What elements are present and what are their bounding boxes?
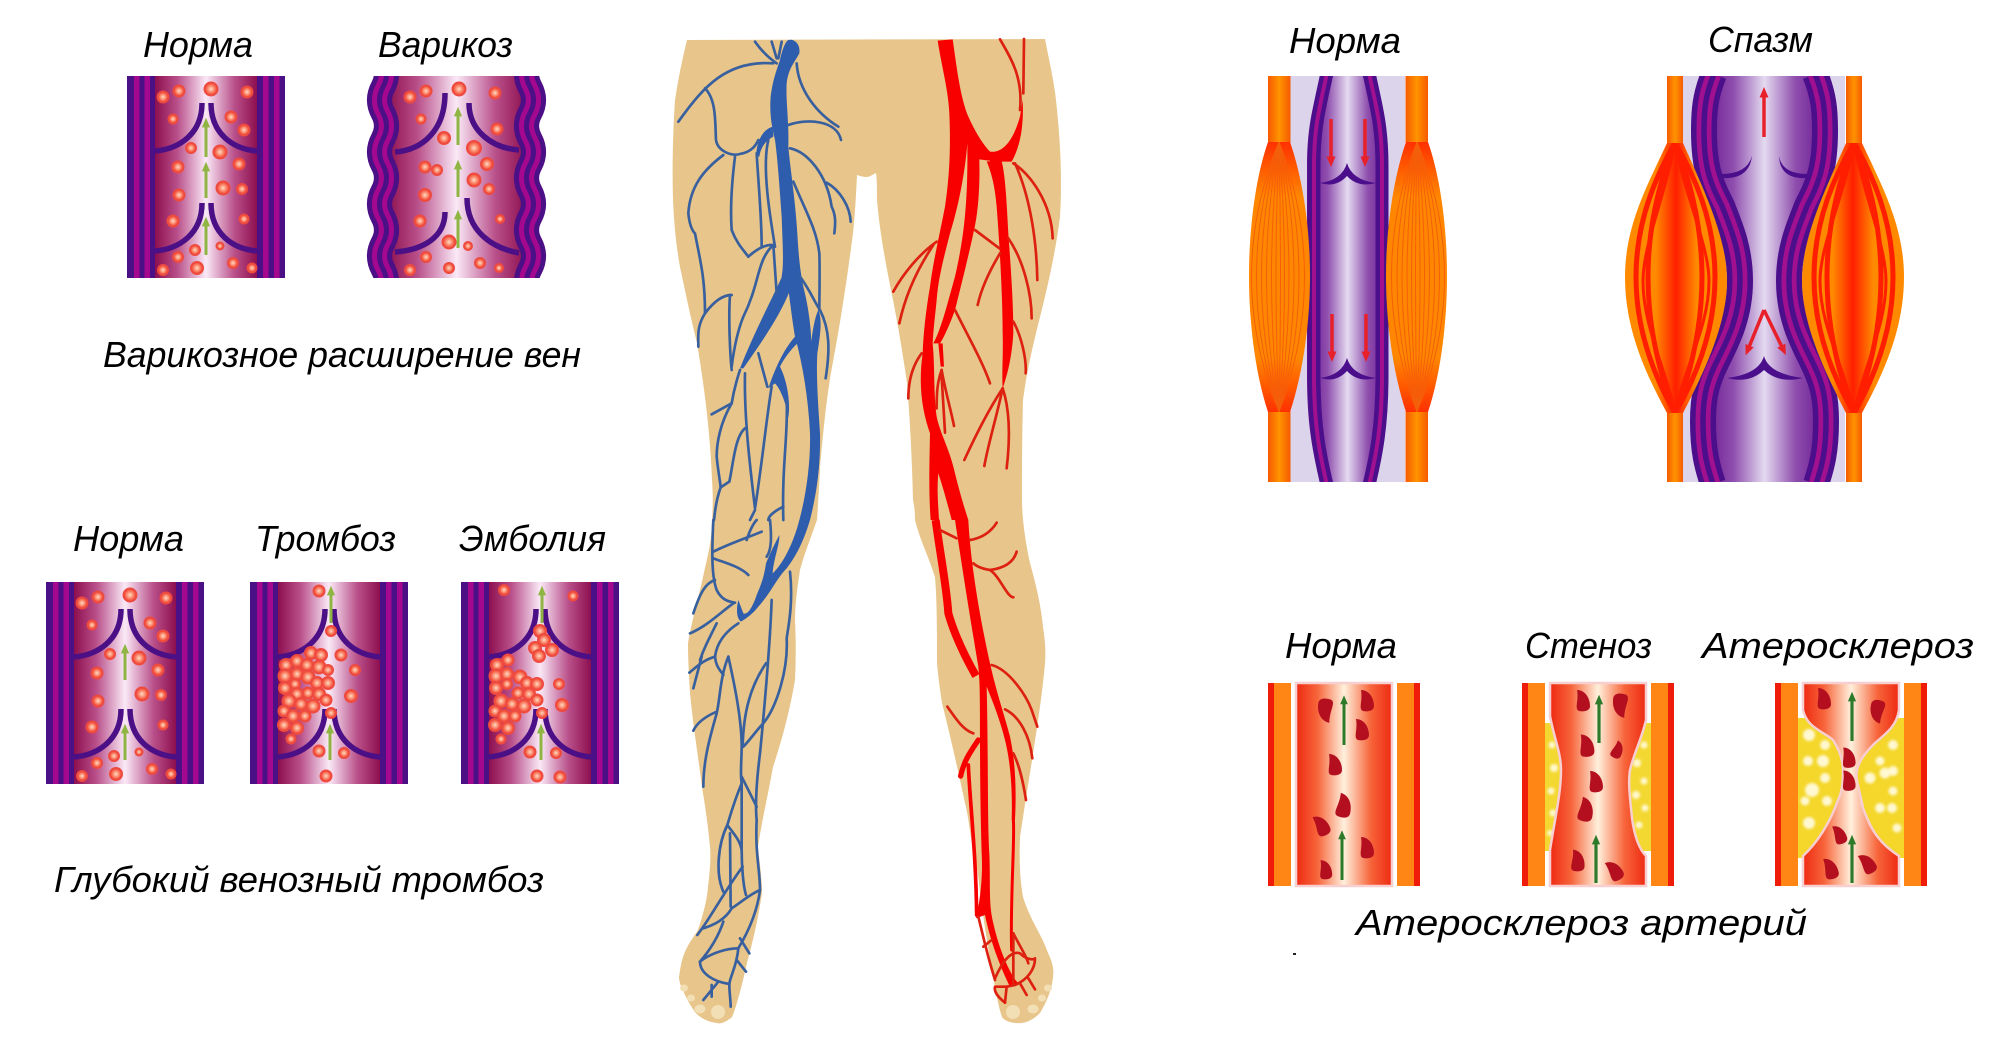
caption: deep vein thrombosis: Глубокий венозный тромбоз [54,859,544,900]
small speck [1293,953,1296,955]
caption: varicose veins: Варикозное расширение вен [103,334,581,375]
flow arrows [456,115,460,248]
vein lumen [1307,76,1388,482]
flow arrows [330,594,331,760]
legs silhouette [673,39,1061,1023]
heading: Норма: Норма [143,24,253,65]
panel: thrombosis [250,582,408,784]
thrombus cluster [278,647,334,744]
vein walls [1314,73,1382,485]
legs illustration [673,39,1061,1023]
panel: varicose vein [380,61,534,295]
left muscle [1249,76,1310,482]
panel: stenosis [1522,683,1674,886]
heading: Спазм: Спазм [1708,19,1813,60]
arteries (red) lower [936,520,1037,1003]
heading: Эмболия: Эмболия [459,518,606,559]
arrows [1331,119,1366,353]
heading: Тромбоз: Тромбоз [255,518,396,559]
veins (blue) lower [689,520,810,1007]
panel: normal vein [127,76,285,278]
valves [1721,156,1808,380]
embolus cluster [489,654,543,744]
toes [680,984,1052,1019]
panel: embolism [461,582,619,784]
blood cells [314,586,360,782]
red cells [1312,690,1374,879]
veins (blue) upper [678,40,851,520]
heading: Варикоз: Варикоз [378,24,513,65]
right muscle [1386,76,1447,482]
left muscle [1625,76,1727,482]
right muscle [1802,76,1904,482]
flow arrows [204,126,208,255]
arrows [1749,96,1782,347]
caption: arterial atherosclerosis: Атеросклероз артерий [1354,902,1807,943]
flow arrows [541,594,542,760]
lumen [1296,683,1392,886]
red cells [1571,690,1629,883]
heading: Атеросклероз: Атеросклероз [1700,625,1974,666]
panel: muscle spasm [1625,74,1904,484]
flow arrows [1850,700,1854,883]
wavy vein walls [380,61,534,295]
heading: Норма: Норма [73,518,184,559]
panel: normal muscle pump [1249,73,1447,485]
blood cells [76,588,176,781]
panel: normal artery [1268,683,1420,886]
vein walls [1703,74,1826,484]
blood cells [499,585,578,782]
blood cells [404,82,504,275]
flow arrows [1342,703,1344,880]
plaque [1798,718,1904,858]
red cells [1818,688,1886,880]
flow arrows [124,652,126,760]
plaque [1545,723,1651,851]
arteries (red) upper [893,39,1053,520]
lumen [1550,683,1646,886]
valves [395,93,519,253]
heading: Стеноз: Стеноз [1525,625,1652,666]
valves [1320,163,1376,379]
heading: Норма: Норма [1289,20,1401,61]
flow arrows [1596,703,1599,883]
vein lumen [1703,76,1826,482]
panel: normal vein lower [46,582,204,784]
lumen [1803,683,1899,886]
blood cells [158,82,256,275]
heading: Норма: Норма [1285,625,1397,666]
panel: atherosclerosis [1775,683,1927,886]
